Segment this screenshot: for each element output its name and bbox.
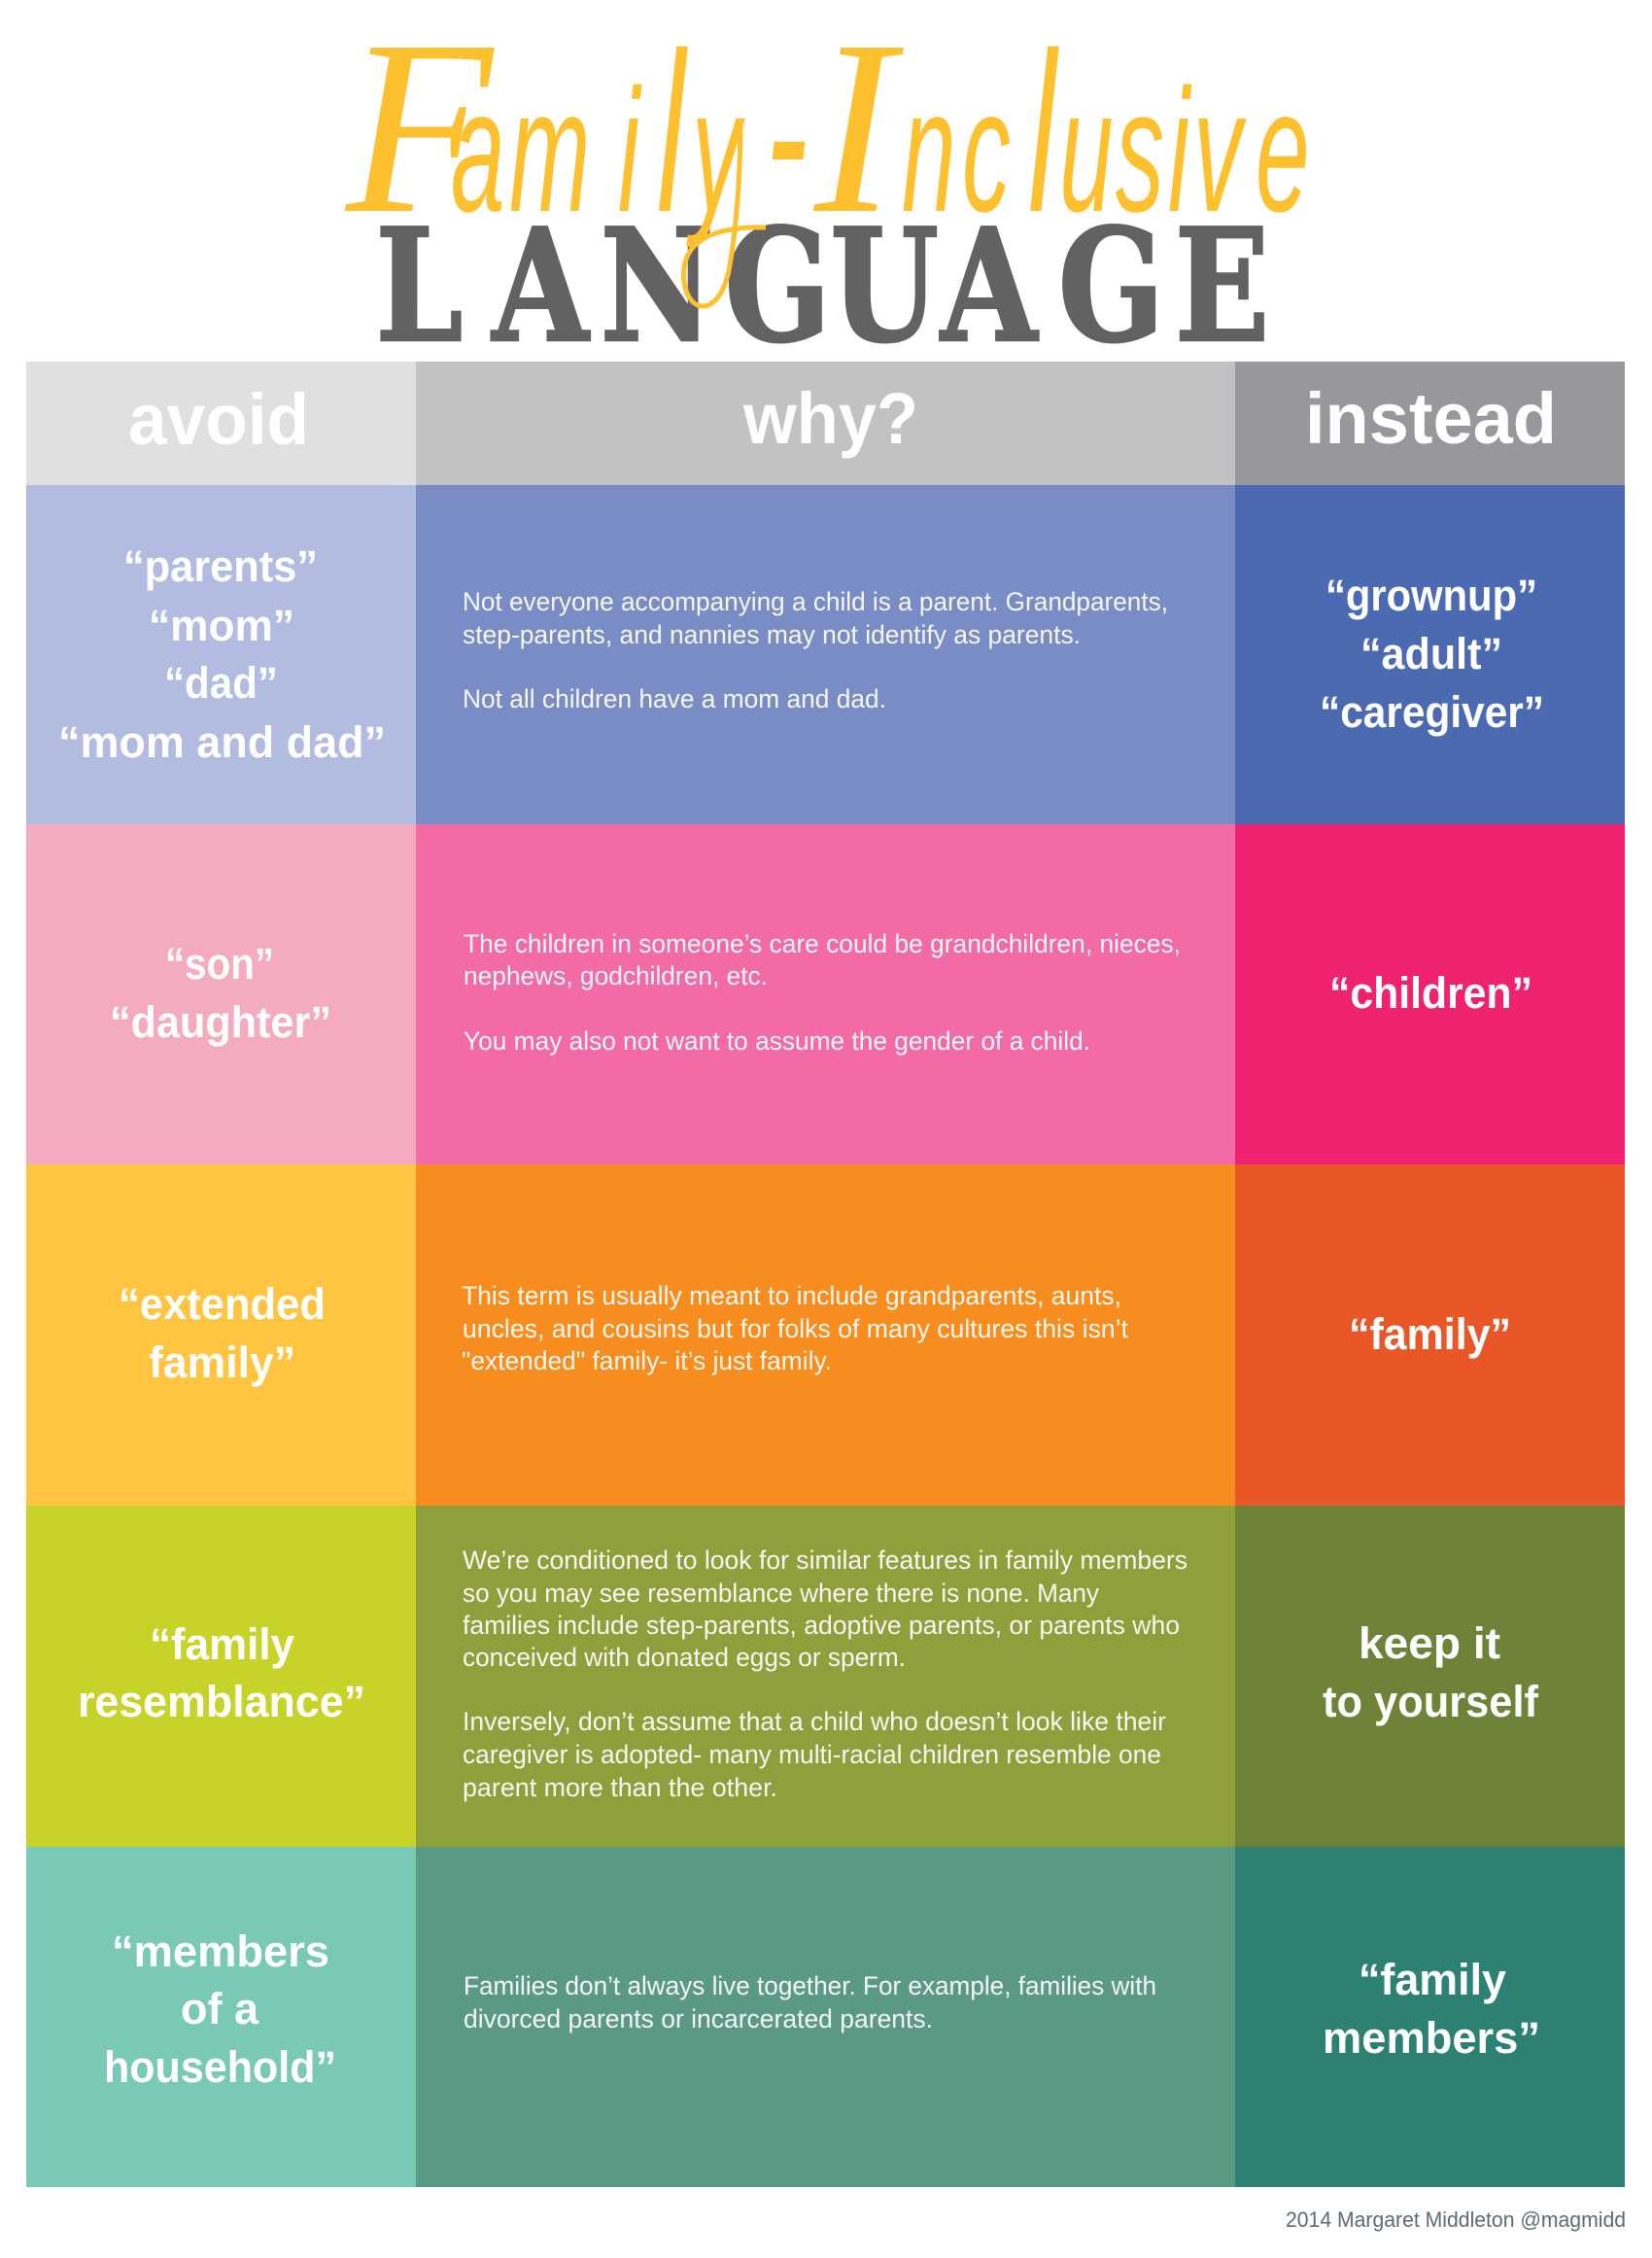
why cell: Inversely, don’t assume that a child who doesn’t look like their xyxy=(463,1707,1166,1736)
why cell: "extended" family- it’s just family. xyxy=(462,1346,832,1375)
avoid cell: “dad” xyxy=(164,658,278,708)
avoid cell xyxy=(26,1506,416,1847)
header: why?: why? xyxy=(742,378,918,459)
header row xyxy=(26,362,1625,485)
row: family resemblance xyxy=(26,1506,1625,1847)
why cell: Not everyone accompanying a child is a parent. Grandparents, xyxy=(463,587,1168,616)
why cell: You may also not want to assume the gender of a child. xyxy=(464,1026,1090,1056)
why cell: families include step-parents, adoptive parents, or parents who xyxy=(463,1611,1180,1640)
header: why? xyxy=(416,362,1235,485)
why cell: We’re conditioned to look for similar features in family members xyxy=(463,1546,1187,1575)
row: son daughter xyxy=(26,824,1625,1164)
header: instead xyxy=(1235,362,1625,485)
avoid cell: “parents” xyxy=(123,541,318,591)
why cell xyxy=(416,1164,1235,1506)
avoid cell: of a xyxy=(181,1984,259,2033)
avoid cell: “mom and dad” xyxy=(58,717,386,767)
avoid cell: family” xyxy=(149,1337,295,1387)
avoid cell: “mom” xyxy=(149,601,294,650)
instead cell: keep it xyxy=(1359,1618,1500,1668)
instead cell xyxy=(1235,1847,1625,2187)
avoid cell: “extended xyxy=(119,1279,326,1329)
why cell xyxy=(416,824,1235,1164)
why cell xyxy=(416,1847,1235,2187)
avoid cell xyxy=(26,1847,416,2187)
instead cell: “children” xyxy=(1329,968,1532,1018)
avoid cell xyxy=(26,485,416,824)
why cell: parent more than the other. xyxy=(463,1773,777,1802)
why cell: so you may see resemblance where there is none. Many xyxy=(463,1579,1099,1608)
why cell: divorced parents or incarcerated parents. xyxy=(464,2004,933,2033)
title word: Family-Inclusive: nclusive xyxy=(902,7,1310,261)
why cell xyxy=(416,485,1235,824)
instead cell: “caregiver” xyxy=(1320,687,1544,737)
avoid cell: “family xyxy=(150,1619,294,1669)
instead cell: “adult” xyxy=(1360,629,1502,678)
why cell: nephews, godchildren, etc. xyxy=(464,961,768,990)
why cell: Not all children have a mom and dad. xyxy=(463,684,886,713)
instead cell xyxy=(1235,1164,1625,1506)
avoid cell: household” xyxy=(104,2042,336,2092)
title word: LANGUAGE: LANGUAGE xyxy=(375,195,1269,378)
why cell: Families don’t always live together. For example, families with xyxy=(464,1971,1156,2000)
why cell: step-parents, and nannies may not identify as parents. xyxy=(463,620,1081,649)
why cell xyxy=(416,1506,1235,1847)
why cell: uncles, and cousins but for folks of many cultures this isn’t xyxy=(463,1314,1128,1343)
avoid cell xyxy=(26,824,416,1164)
instead cell: “grownup” xyxy=(1325,571,1537,620)
instead cell xyxy=(1235,824,1625,1164)
instead cell: to yourself xyxy=(1323,1677,1539,1726)
row: members of a household xyxy=(26,1847,1625,2187)
instead cell: “family” xyxy=(1349,1309,1511,1359)
why cell: This term is usually meant to include grandparents, aunts, xyxy=(462,1281,1121,1310)
avoid cell: “son” xyxy=(165,939,274,989)
avoid cell: “daughter” xyxy=(110,997,331,1047)
row: extended family xyxy=(26,1164,1625,1506)
instead cell xyxy=(1235,485,1625,824)
header: avoid xyxy=(26,362,416,485)
avoid cell: resemblance” xyxy=(78,1677,365,1726)
title xyxy=(344,0,1310,378)
instead cell xyxy=(1235,1506,1625,1847)
title flourish: y descender loop xyxy=(683,122,766,306)
instead cell: members” xyxy=(1323,2013,1540,2063)
header: instead: instead xyxy=(1305,378,1557,459)
why cell: caregiver is adopted- many multi-racial children resemble one xyxy=(463,1740,1161,1769)
why cell: conceived with donated eggs or sperm. xyxy=(463,1643,906,1672)
header: avoid: avoid xyxy=(128,379,309,460)
avoid cell: “members xyxy=(112,1927,329,1976)
avoid cell xyxy=(26,1164,416,1506)
title word: Family-Inclusive xyxy=(344,0,1310,265)
title word: Family-Inclusive: am ily- xyxy=(451,7,808,261)
instead cell: “family xyxy=(1359,1955,1506,2004)
footer credit: 2014 Margaret Middleton @magmidd xyxy=(1286,2207,1626,2232)
row: parents xyxy=(26,485,1625,824)
why cell: The children in someone’s care could be grandchildren, nieces, xyxy=(464,929,1181,958)
